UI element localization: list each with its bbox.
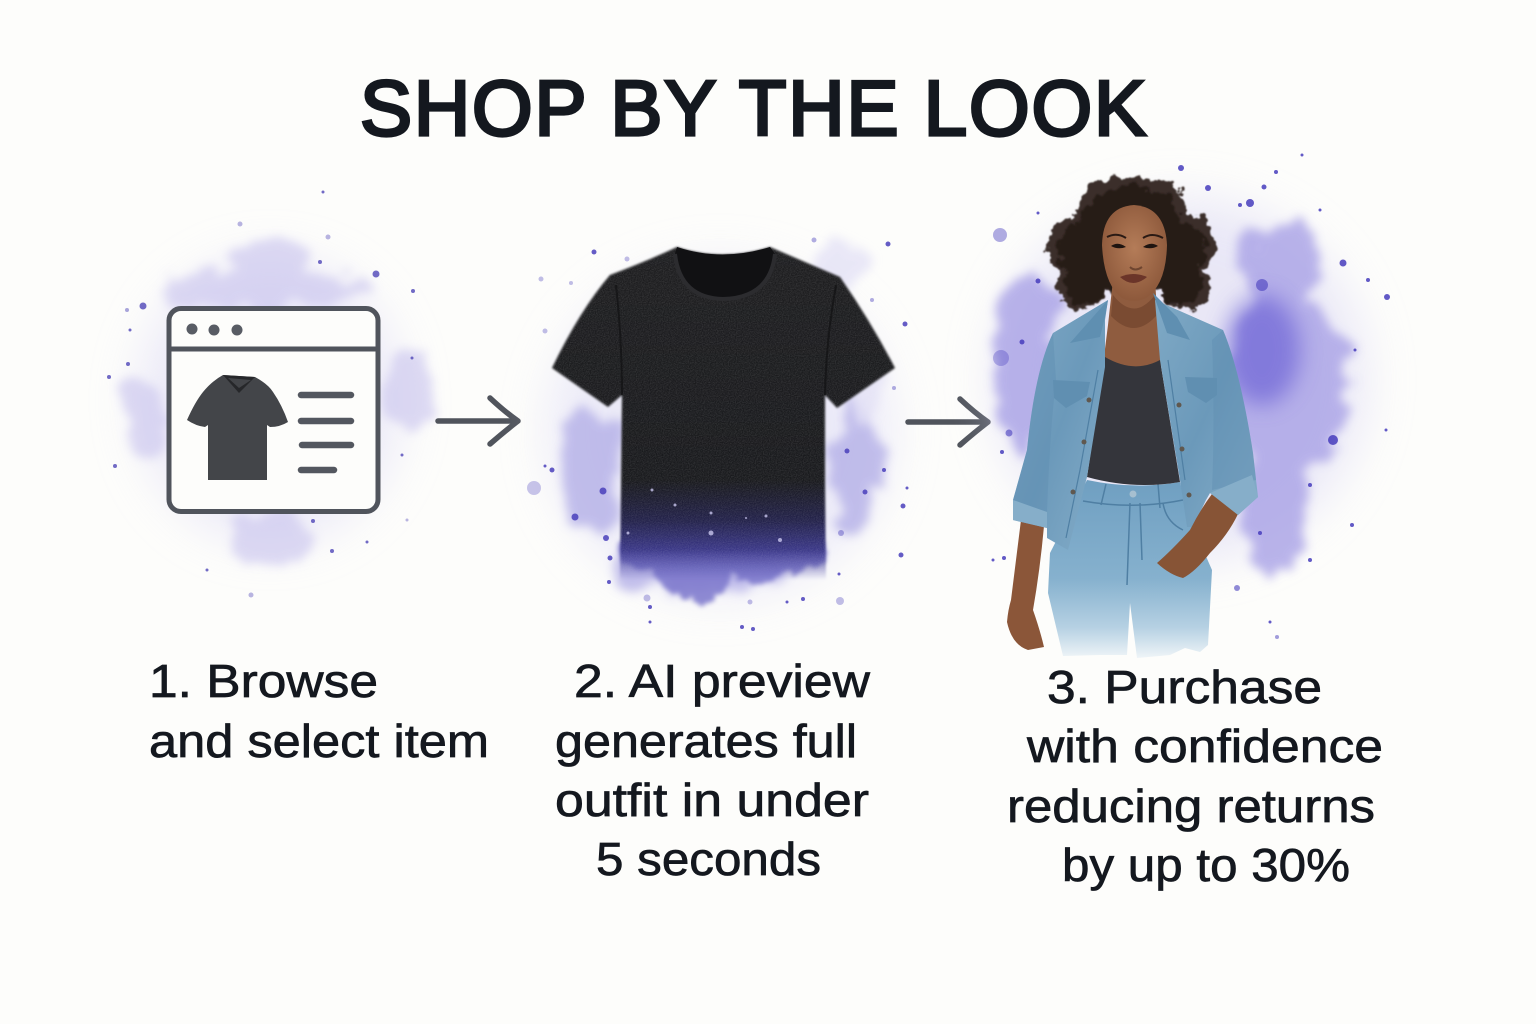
jacket collars xyxy=(1070,300,1108,343)
jeans xyxy=(1048,480,1212,658)
step 3 caption: with confidence xyxy=(1026,720,1383,772)
hair xyxy=(1048,176,1216,309)
watercolor splash: step 1 xyxy=(107,190,434,598)
icon: small v-neck t-shirt xyxy=(187,375,288,480)
collar xyxy=(675,247,775,299)
icon: browser window with t-shirt xyxy=(169,308,378,512)
step 1 caption: and select item xyxy=(149,715,489,767)
denim jacket: viewer-right panel xyxy=(1155,300,1258,527)
step 2 caption: generates full xyxy=(555,715,857,767)
list lines xyxy=(301,395,351,470)
jacket cuffs xyxy=(1013,500,1047,528)
step 1: browse illustration xyxy=(107,190,434,598)
neck and chest xyxy=(1103,280,1162,370)
step 3 caption xyxy=(1007,661,1383,891)
title: SHOP BY THE LOOK xyxy=(360,64,1146,152)
denim jacket: viewer-left panel xyxy=(1013,300,1108,550)
step 2 caption xyxy=(555,655,871,885)
facial features xyxy=(1107,235,1163,283)
sleeve seams xyxy=(616,285,836,395)
step 1 caption xyxy=(149,655,489,767)
step 2 caption: 2. AI preview xyxy=(574,655,871,707)
shirt wash drips xyxy=(620,520,826,604)
dark tank top xyxy=(1087,357,1180,485)
sleeve shading xyxy=(1013,330,1256,512)
hem speckles xyxy=(626,488,782,542)
arrow: step 2 to step 3 xyxy=(908,399,988,445)
watercolor splash: step 3 xyxy=(992,154,1390,639)
jacket plackets and buttons xyxy=(1066,360,1185,538)
arrow: step 1 to step 2 xyxy=(438,398,518,444)
right forearm and hand xyxy=(1157,494,1238,578)
icon: black t-shirt xyxy=(552,247,895,604)
step 3 caption: reducing returns xyxy=(1007,780,1375,832)
jacket pocket flaps xyxy=(1053,380,1090,408)
illustration: woman xyxy=(1007,176,1258,658)
left arm and hand xyxy=(1007,520,1044,650)
step 3 caption: by up to 30% xyxy=(1062,839,1350,891)
watercolor splash: step 2 xyxy=(527,238,908,631)
face xyxy=(1102,205,1167,301)
step 1 caption: 1. Browse xyxy=(149,655,378,707)
step 2 caption: outfit in under xyxy=(555,774,869,826)
step 3 caption: 3. Purchase xyxy=(1047,661,1322,713)
step 2: t-shirt preview xyxy=(527,238,908,631)
jeans details xyxy=(1083,484,1183,585)
step 3: woman in denim xyxy=(992,154,1390,658)
step 2 caption: 5 seconds xyxy=(596,833,821,885)
